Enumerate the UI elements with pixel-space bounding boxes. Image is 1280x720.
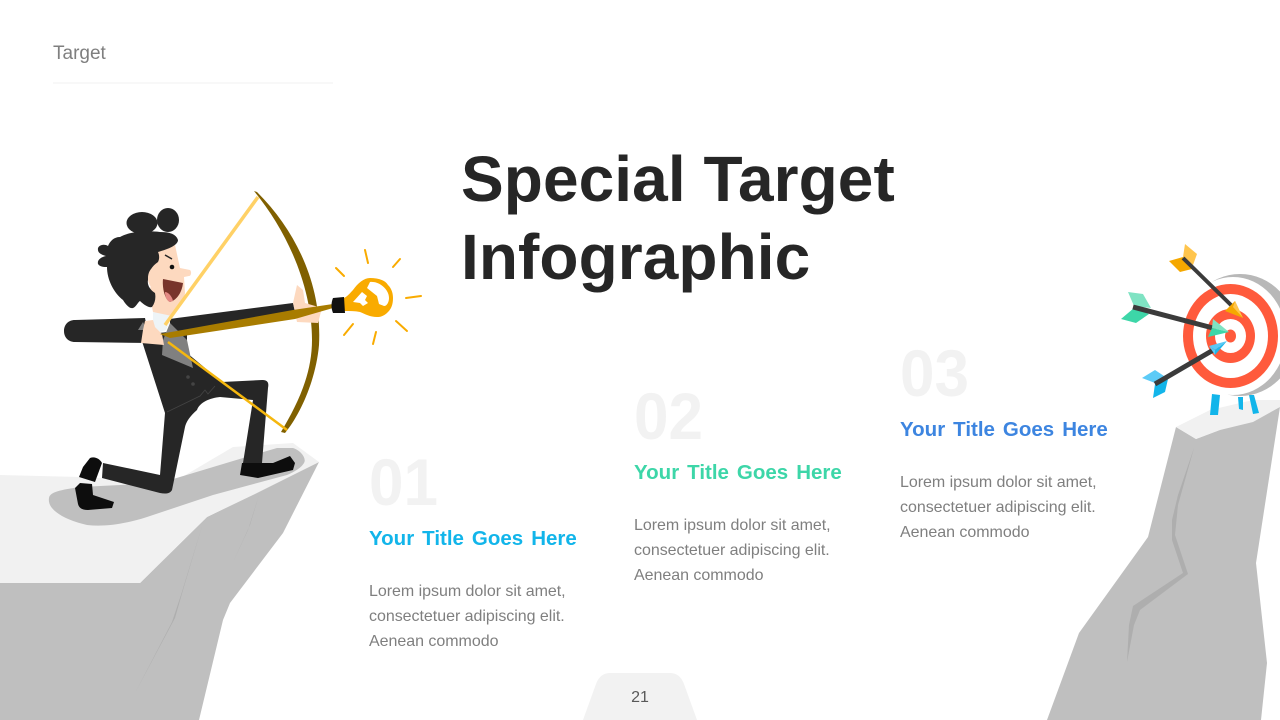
heading 01: Your Title Goes Here (369, 527, 577, 550)
body 02: Lorem ipsum dolor sit amet, (634, 517, 831, 534)
shoes (240, 456, 295, 478)
page number: 21 (631, 689, 649, 706)
ear (148, 268, 160, 288)
target board (1180, 274, 1280, 415)
legs and torso (102, 330, 268, 494)
bow strings (165, 197, 258, 325)
front arm (170, 303, 296, 335)
body 03: Lorem ipsum dolor sit amet, (900, 474, 1097, 491)
hair (98, 208, 179, 308)
face (150, 245, 191, 317)
archer character (64, 191, 421, 510)
heading 03: Your Title Goes Here (900, 418, 1108, 441)
title: Special Target (461, 143, 895, 215)
title: Infographic (461, 221, 810, 293)
section label: Target (53, 43, 106, 64)
target legs (1210, 394, 1259, 415)
body 03: consectetuer adipiscing elit. (900, 499, 1096, 516)
body 02 (634, 517, 831, 584)
arrow: orange (1169, 244, 1243, 318)
eye and brow (170, 265, 174, 269)
number 03: 03 (900, 336, 969, 410)
item 01 (369, 445, 577, 650)
item 02 (634, 379, 842, 584)
right cliff (1047, 400, 1280, 720)
heading 02: Your Title Goes Here (634, 461, 842, 484)
number 01: 01 (369, 445, 438, 519)
body 01: consectetuer adipiscing elit. (369, 608, 565, 625)
arrow: green (1121, 292, 1229, 337)
left cliff (0, 443, 319, 720)
hands (141, 320, 164, 345)
arrow shaft (160, 304, 333, 338)
item 03 (900, 336, 1108, 541)
body 01: Aenean commodo (369, 633, 498, 650)
arrow: blue (1142, 341, 1227, 398)
number 02: 02 (634, 379, 703, 453)
lightbulb (332, 250, 421, 344)
collar (153, 312, 172, 332)
body 03: Aenean commodo (900, 524, 1029, 541)
body 02: consectetuer adipiscing elit. (634, 542, 830, 559)
mouth (163, 279, 183, 302)
bow (254, 191, 319, 433)
title (461, 143, 895, 293)
body 01 (369, 583, 566, 650)
body 03 (900, 474, 1097, 541)
back arm (64, 318, 150, 343)
body 02: Aenean commodo (634, 567, 763, 584)
jacket buttons and creases (167, 375, 215, 412)
vest (162, 323, 193, 368)
page number tab (583, 673, 697, 720)
body 01: Lorem ipsum dolor sit amet, (369, 583, 566, 600)
